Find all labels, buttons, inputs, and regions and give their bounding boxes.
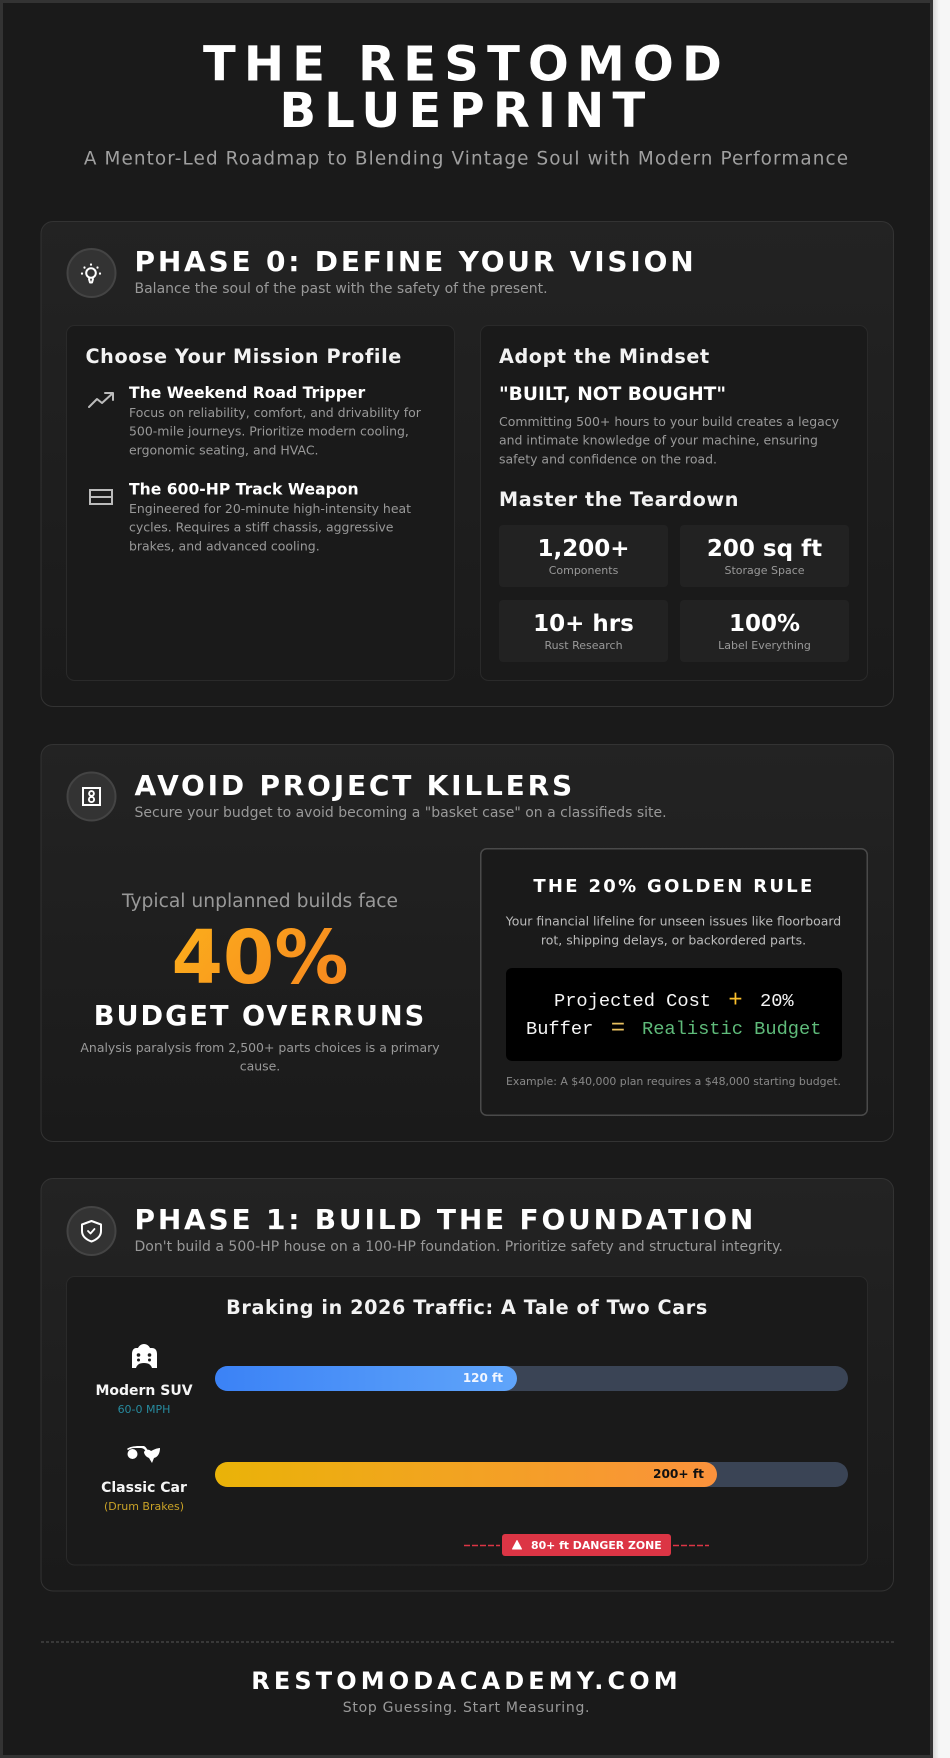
heading: adopt the mindset: Adopt the Mindset: [499, 345, 710, 368]
formula box: [506, 968, 842, 1061]
bar: classic car 200+ ft: [215, 1462, 848, 1487]
stat: rust research: 10+ hrs: [533, 611, 634, 637]
text: mindset description: [499, 414, 839, 466]
stat: storage space: Storage Space: [724, 564, 805, 577]
text: modern suv label: [95, 1383, 193, 1416]
heading: braking chart: Braking in 2026 Traffic: A Tale of Two Cars: [226, 1296, 708, 1319]
text: financial lifeline: rot, shipping delays, or backordered parts.: [541, 932, 806, 948]
callout: danger zone: 80+ ft DANGER ZONE: [531, 1539, 662, 1552]
formula box: 20%: [760, 990, 794, 1012]
subtitle: A Mentor-Led Roadmap to Blending Vintage Soul with Modern Performance: [84, 148, 849, 170]
text: mindset description: safety and confidence on the road.: [499, 451, 717, 466]
big number: 40%: [171, 915, 349, 1001]
bar: modern suv 120 ft: [215, 1366, 848, 1391]
formula box: =: [611, 1016, 625, 1042]
text: analysis paralysis: [80, 1040, 440, 1074]
text: weekend road tripper: 500-mile journeys. Prioritize modern cooling,: [129, 424, 409, 439]
panel: phase 1 build the foundation: [41, 1178, 894, 1591]
icon: classic car: [127, 1446, 160, 1463]
heading: golden rule: THE 20% GOLDEN RULE: [533, 876, 815, 897]
stat: label everything: Label Everything: [718, 639, 811, 652]
panel: phase 0 define your vision: [41, 222, 894, 706]
title: [203, 36, 730, 139]
text: track weapon: Engineered for 20-minute high-intensity heat: [129, 501, 411, 516]
formula box: Projected Cost: [554, 990, 711, 1012]
text: financial lifeline: Your financial lifeline for unseen issues like floorboard: [505, 914, 841, 928]
text: phase 1 subheading: Don't build a 500-HP house on a 100-HP foundation. Prioritize safety and structural integrity.: [134, 1239, 783, 1255]
stat: label everything: 100%: [729, 611, 800, 637]
formula box: Buffer: [526, 1018, 593, 1040]
stat: components: Components: [549, 564, 619, 577]
callout: 40 percent budget overruns: Typical unplanned builds face: [121, 891, 398, 912]
heading: phase 0: PHASE 0: DEFINE YOUR VISION: [134, 245, 696, 278]
callout: danger zone: [464, 1534, 709, 1556]
text: classic car label: (Drum Brakes): [104, 1500, 184, 1513]
divider: footer: [41, 1641, 894, 1643]
text: track weapon: brakes, and advanced cooling.: [129, 538, 320, 553]
text: avoid project killers subheading: Secure your budget to avoid becoming a "basket case" on a classifieds site.: [134, 805, 667, 821]
text: financial lifeline: [505, 914, 841, 948]
panel: 20 percent golden rule: [481, 849, 867, 1115]
text: modern suv label: 60-0 MPH: [118, 1403, 170, 1416]
stat: components: [499, 525, 668, 587]
panel: adopt the mindset: [480, 326, 868, 680]
text: modern suv label: Modern SUV: [95, 1383, 193, 1399]
icon: shield check: [68, 1207, 116, 1255]
bar: classic car 200+ ft: 200+ ft: [653, 1467, 704, 1481]
formula box: Realistic Budget: [642, 1018, 821, 1040]
stat: rust research: [499, 600, 668, 662]
icon: track panel: [90, 490, 112, 504]
heading: master the teardown: Master the Teardown: [499, 488, 739, 511]
heading: mission profile: Choose Your Mission Profile: [86, 345, 402, 368]
icon: trending up: [89, 393, 113, 407]
heading: avoid project killers: AVOID PROJECT KILLERS: [134, 769, 575, 802]
text: phase 0 subheading: Balance the soul of the past with the safety of the present.: [134, 281, 548, 297]
text: mindset description: Committing 500+ hours to your build creates a legacy: [499, 414, 839, 429]
stat: components: 1,200+: [537, 536, 630, 562]
text: weekend road tripper: ergonomic seating, and HVAC.: [129, 442, 318, 457]
callout: 40 percent budget overruns: [80, 891, 440, 1074]
text: weekend road tripper: Focus on reliability, comfort, and drivability for: [129, 405, 422, 420]
footer: tagline: Stop Guessing. Start Measuring.: [343, 1700, 590, 1716]
panel: braking chart: [66, 1276, 868, 1565]
label: budget overruns: BUDGET OVERRUNS: [94, 1001, 426, 1032]
text: weekend road tripper: [129, 384, 422, 457]
icon: modern suv: [132, 1344, 157, 1368]
stat: label everything: [680, 600, 849, 662]
text: track weapon: [129, 480, 411, 553]
text: analysis paralysis: cause.: [240, 1058, 280, 1074]
text: analysis paralysis: Analysis paralysis from 2,500+ parts choices is a primary: [80, 1040, 440, 1055]
footer: website: RESTOMODACADEMY.COM: [251, 1667, 682, 1695]
text: classic car label: Classic Car: [101, 1480, 187, 1496]
text: built not bought: "BUILT, NOT BOUGHT": [499, 384, 726, 405]
text: mindset description: and intimate knowledge of your machine, ensuring: [499, 433, 818, 448]
title: THE RESTOMOD: [203, 36, 730, 92]
panel: avoid project killers: [41, 744, 894, 1142]
bar: modern suv 120 ft: 120 ft: [463, 1371, 503, 1385]
text: example: Example: A $40,000 plan requires a $48,000 starting budget.: [506, 1075, 841, 1088]
text: classic car label: [101, 1480, 187, 1513]
stat: rust research: Rust Research: [544, 639, 623, 652]
stat: storage space: 200 sq ft: [707, 536, 822, 562]
text: weekend road tripper: The Weekend Road Tripper: [129, 384, 365, 402]
icon: warning triangle: [512, 1540, 522, 1549]
text: track weapon: cycles. Requires a stiff chassis, aggressive: [129, 520, 393, 535]
icon: light bulb: [68, 249, 116, 297]
heading: phase 1: PHASE 1: BUILD THE FOUNDATION: [134, 1203, 756, 1236]
icon: dollar bill: [68, 772, 116, 820]
formula box: +: [728, 988, 743, 1014]
panel: choose your mission profile: [66, 326, 454, 680]
stat: storage space: [680, 525, 849, 587]
text: track weapon: The 600-HP Track Weapon: [129, 480, 359, 498]
title: BLUEPRINT: [280, 83, 653, 139]
